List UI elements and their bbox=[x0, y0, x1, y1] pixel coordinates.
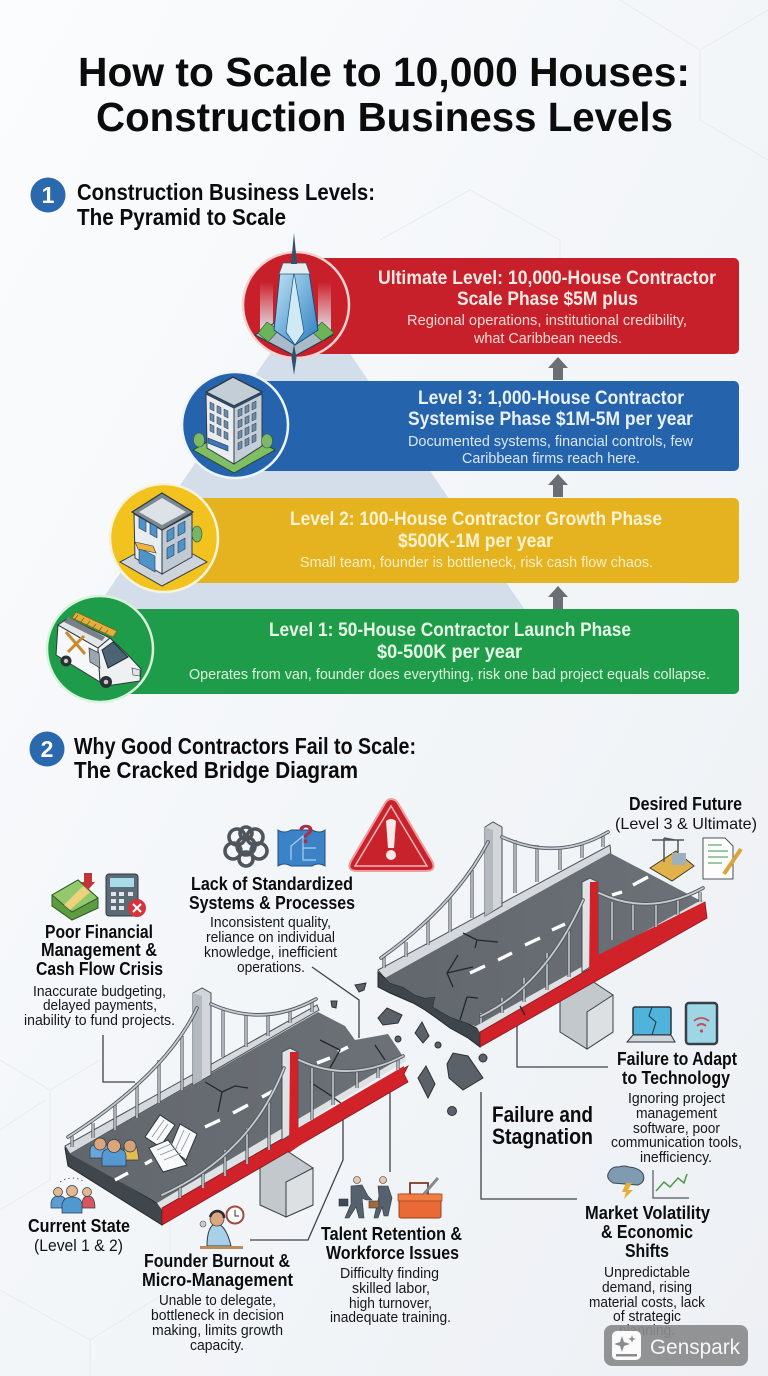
text: failure to adapt to technology: Ignoring project bbox=[628, 1090, 726, 1107]
text: current state bbox=[28, 1216, 130, 1255]
panel: level 3 bbox=[260, 381, 739, 471]
right bridge rails bbox=[381, 832, 608, 968]
text: talent retention: inadequate training. bbox=[330, 1309, 451, 1326]
text: talent retention: Workforce Issues bbox=[326, 1243, 459, 1263]
text: failure to adapt to technology: Failure to Adapt bbox=[617, 1049, 737, 1069]
right bridge front rails bbox=[481, 888, 703, 1023]
panel: ultimate level bbox=[315, 258, 739, 354]
text: lack of standardized systems: Systems & Processes bbox=[189, 893, 355, 913]
panel: level 2: Small team, founder is bottleneck, risk cash flow chaos. bbox=[300, 554, 653, 571]
panel: ultimate level: what Caribbean needs. bbox=[473, 330, 622, 347]
text: founder burnout: Micro-Management bbox=[142, 1270, 293, 1290]
icon: tangled knot and blueprint: ? bbox=[298, 819, 314, 849]
text: current state: Current State bbox=[28, 1216, 130, 1236]
text: market volatility: of strategic bbox=[613, 1308, 681, 1325]
genspark badge: Genspark bbox=[650, 1336, 740, 1359]
text: failure to adapt to technology: software, poor bbox=[633, 1120, 720, 1137]
text: failure and stagnation: Stagnation bbox=[492, 1124, 593, 1149]
icon: small office bbox=[110, 484, 218, 592]
left bridge people bbox=[90, 1138, 139, 1166]
text: founder burnout: making, limits growth bbox=[152, 1322, 283, 1339]
panel: ultimate level: Scale Phase $5M plus bbox=[457, 289, 638, 310]
icon: skyscraper bbox=[243, 233, 349, 375]
panel: level 1: Operates from van, founder does everything, risk one bad project equals collapse. bbox=[189, 666, 710, 683]
text: failure to adapt to technology: communication tools, bbox=[611, 1134, 742, 1151]
text: lack of standardized systems: Lack of Standardized bbox=[191, 874, 353, 894]
section 1 heading bbox=[30, 178, 375, 230]
text: talent retention: skilled labor, bbox=[352, 1280, 430, 1297]
panel: level 2: $500K-1M per year bbox=[398, 531, 554, 552]
pyramid backdrop bbox=[95, 295, 525, 610]
panel: level 1: Level 1: 50-House Contractor Launch Phase bbox=[269, 620, 631, 641]
text: market volatility: Unpredictable bbox=[604, 1264, 690, 1281]
left bridge front tower bbox=[282, 1048, 404, 1153]
text: founder burnout: bottleneck in decision bbox=[151, 1307, 284, 1324]
icon: cracked laptop and tablet bbox=[627, 1003, 717, 1044]
left bridge back tower bbox=[193, 988, 211, 1085]
section 2 heading: The Cracked Bridge Diagram bbox=[74, 757, 358, 783]
icon: warning triangle bbox=[349, 799, 434, 871]
text: failure and stagnation bbox=[492, 1102, 593, 1149]
left bridge front rails bbox=[162, 1056, 403, 1198]
text: current state: (Level 1 & 2) bbox=[34, 1237, 123, 1255]
icon: team of three bbox=[51, 1178, 95, 1213]
panel: ultimate level: Ultimate Level: 10,000-House Contractor bbox=[378, 268, 717, 289]
title bbox=[78, 49, 690, 140]
text: poor financial management: Cash Flow Crisis bbox=[36, 959, 163, 979]
text: poor financial management: Poor Financial bbox=[45, 922, 153, 942]
panel: level 3: Documented systems, financial controls, few bbox=[408, 433, 693, 450]
left bridge documents bbox=[145, 1115, 197, 1172]
text: desired future bbox=[615, 794, 757, 833]
right bridge front tower bbox=[582, 878, 704, 982]
section 2 heading: 2 bbox=[41, 736, 53, 762]
text: desired future: (Level 3 & Ultimate) bbox=[615, 816, 757, 833]
icon: money and calculator bbox=[52, 873, 146, 920]
text: founder burnout bbox=[142, 1251, 293, 1354]
text: failure to adapt to technology: management bbox=[636, 1105, 718, 1122]
text: desired future: Desired Future bbox=[629, 794, 742, 814]
text: market volatility: Market Volatility bbox=[585, 1203, 710, 1223]
text: market volatility: & Economic bbox=[601, 1222, 693, 1242]
right bridge: desired future bbox=[378, 822, 707, 1049]
text: lack of standardized systems: knowledge, inefficient bbox=[204, 944, 338, 961]
icon: crane and contract bbox=[650, 838, 741, 881]
debris rocks bbox=[331, 983, 487, 1116]
icon: van bbox=[47, 596, 153, 702]
icon: workers and toolbox bbox=[339, 1176, 442, 1218]
left bridge rails bbox=[68, 999, 316, 1147]
title: How to Scale to 10,000 Houses: bbox=[78, 49, 690, 95]
text: lack of standardized systems bbox=[189, 874, 355, 976]
section 2 heading: Why Good Contractors Fail to Scale: bbox=[74, 733, 416, 759]
title: Construction Business Levels bbox=[96, 94, 673, 140]
panel: level 2 bbox=[190, 498, 739, 583]
panel: level 2: Level 2: 100-House Contractor Growth Phase bbox=[290, 509, 662, 530]
callout lines bbox=[103, 967, 608, 1240]
text: founder burnout: capacity. bbox=[190, 1337, 244, 1354]
text: market volatility: Shifts bbox=[625, 1241, 669, 1261]
icon: tangled knot and blueprint bbox=[225, 819, 325, 866]
text: founder burnout: Unable to delegate, bbox=[159, 1292, 276, 1309]
icon: founder burnout bbox=[200, 1206, 244, 1249]
genspark badge bbox=[604, 1325, 748, 1366]
text: poor financial management bbox=[24, 922, 175, 1029]
panel: level 1: $0-500K per year bbox=[377, 642, 523, 663]
text: talent retention bbox=[321, 1224, 462, 1326]
text: market volatility: demand, rising bbox=[602, 1279, 692, 1296]
icon: storm cloud and chart bbox=[608, 1166, 689, 1199]
text: talent retention: Talent Retention & bbox=[321, 1224, 462, 1244]
text: failure to adapt to technology bbox=[611, 1049, 742, 1166]
text: lack of standardized systems: reliance on individual bbox=[206, 929, 335, 946]
section 1 heading: 1 bbox=[42, 182, 55, 208]
panel: level 3: Systemise Phase $1M-5M per year bbox=[408, 409, 694, 430]
icon: office building bbox=[182, 372, 288, 478]
text: market volatility: planning. bbox=[619, 1322, 675, 1339]
text: talent retention: Difficulty finding bbox=[340, 1265, 439, 1282]
text: lack of standardized systems: operations. bbox=[237, 959, 305, 976]
text: failure to adapt to technology: inefficiency. bbox=[640, 1149, 712, 1166]
text: poor financial management: delayed payments, bbox=[43, 997, 157, 1014]
section 1 heading: Construction Business Levels: bbox=[77, 179, 375, 205]
panel: level 3: Caribbean firms reach here. bbox=[462, 450, 640, 467]
text: lack of standardized systems: Inconsistent quality, bbox=[210, 914, 331, 931]
arrows between levels bbox=[548, 357, 568, 609]
text: failure to adapt to technology: to Technology bbox=[622, 1068, 730, 1088]
panel: level 1 bbox=[125, 609, 739, 694]
right bridge back tower bbox=[485, 822, 502, 916]
text: poor financial management: Inaccurate budgeting, bbox=[33, 983, 166, 1000]
section 1 heading: The Pyramid to Scale bbox=[77, 204, 286, 230]
panel: level 3: Level 3: 1,000-House Contractor bbox=[418, 388, 685, 409]
panel: ultimate level: Regional operations, institutional credibility, bbox=[407, 312, 687, 329]
left bridge: current state bbox=[65, 988, 408, 1225]
text: failure and stagnation: Failure and bbox=[492, 1102, 593, 1127]
text: talent retention: high turnover, bbox=[349, 1295, 432, 1312]
text: poor financial management: Management & bbox=[41, 940, 157, 960]
text: market volatility bbox=[585, 1203, 710, 1339]
text: poor financial management: inability to fund projects. bbox=[24, 1012, 175, 1029]
text: market volatility: material costs, lack bbox=[589, 1294, 705, 1311]
section 2 heading bbox=[30, 732, 416, 783]
text: founder burnout: Founder Burnout & bbox=[144, 1251, 290, 1271]
